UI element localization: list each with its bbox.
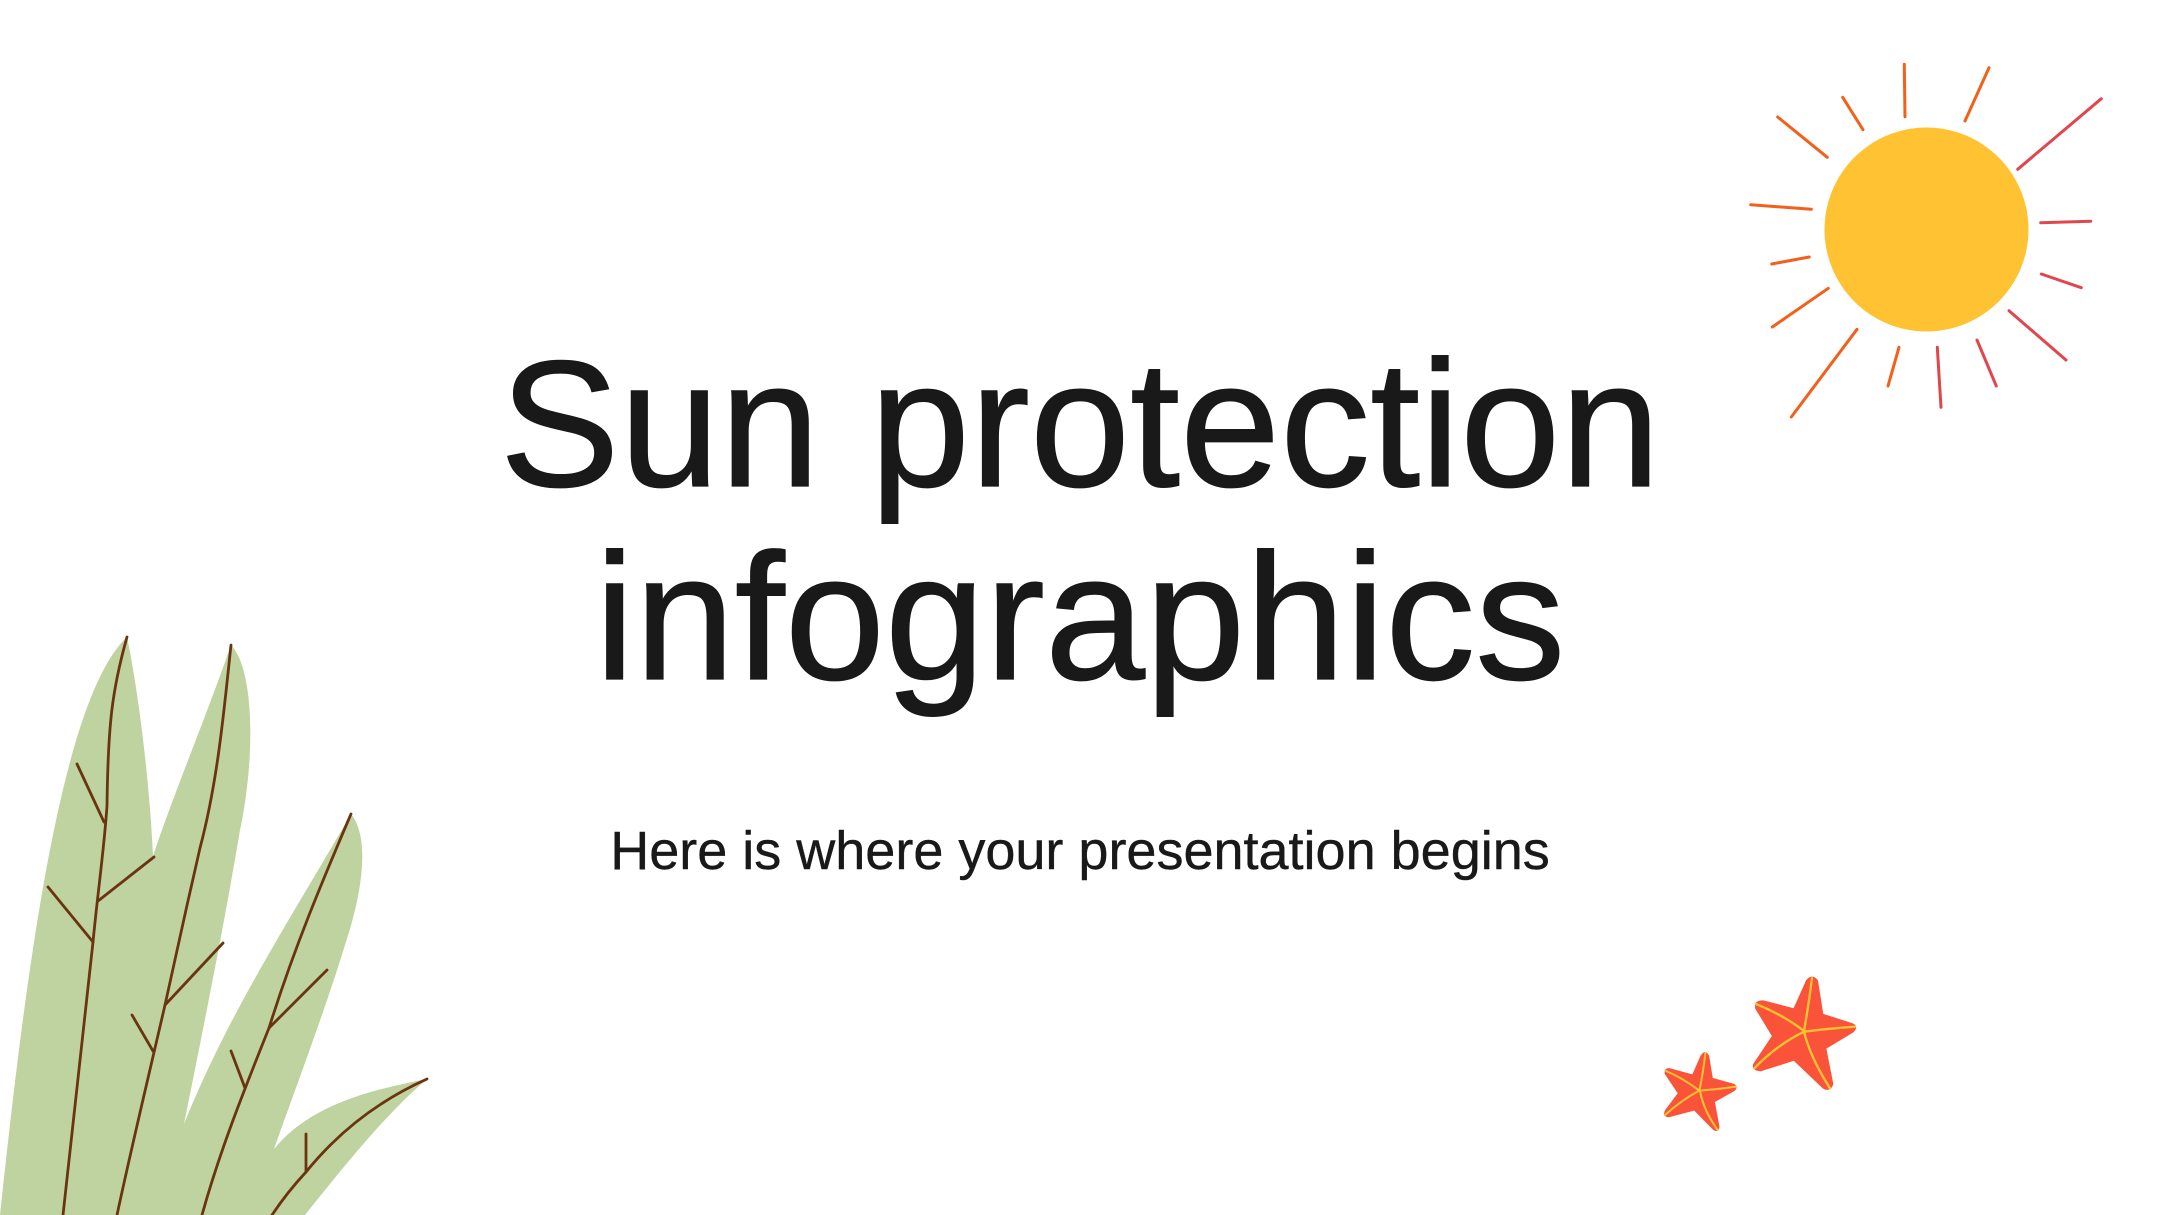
sun rays [1751, 64, 2101, 417]
title: Sun protection [500, 324, 1660, 525]
leaf veins [48, 637, 427, 1215]
icon: large starfish [1754, 977, 1855, 1089]
icon: small starfish [1665, 1053, 1736, 1131]
icon: sun [1751, 64, 2101, 417]
icon: green leaves [0, 637, 427, 1215]
subtitle: Here is where your presentation begins [610, 821, 1550, 881]
title: infographics [595, 517, 1565, 718]
title [500, 324, 1660, 718]
